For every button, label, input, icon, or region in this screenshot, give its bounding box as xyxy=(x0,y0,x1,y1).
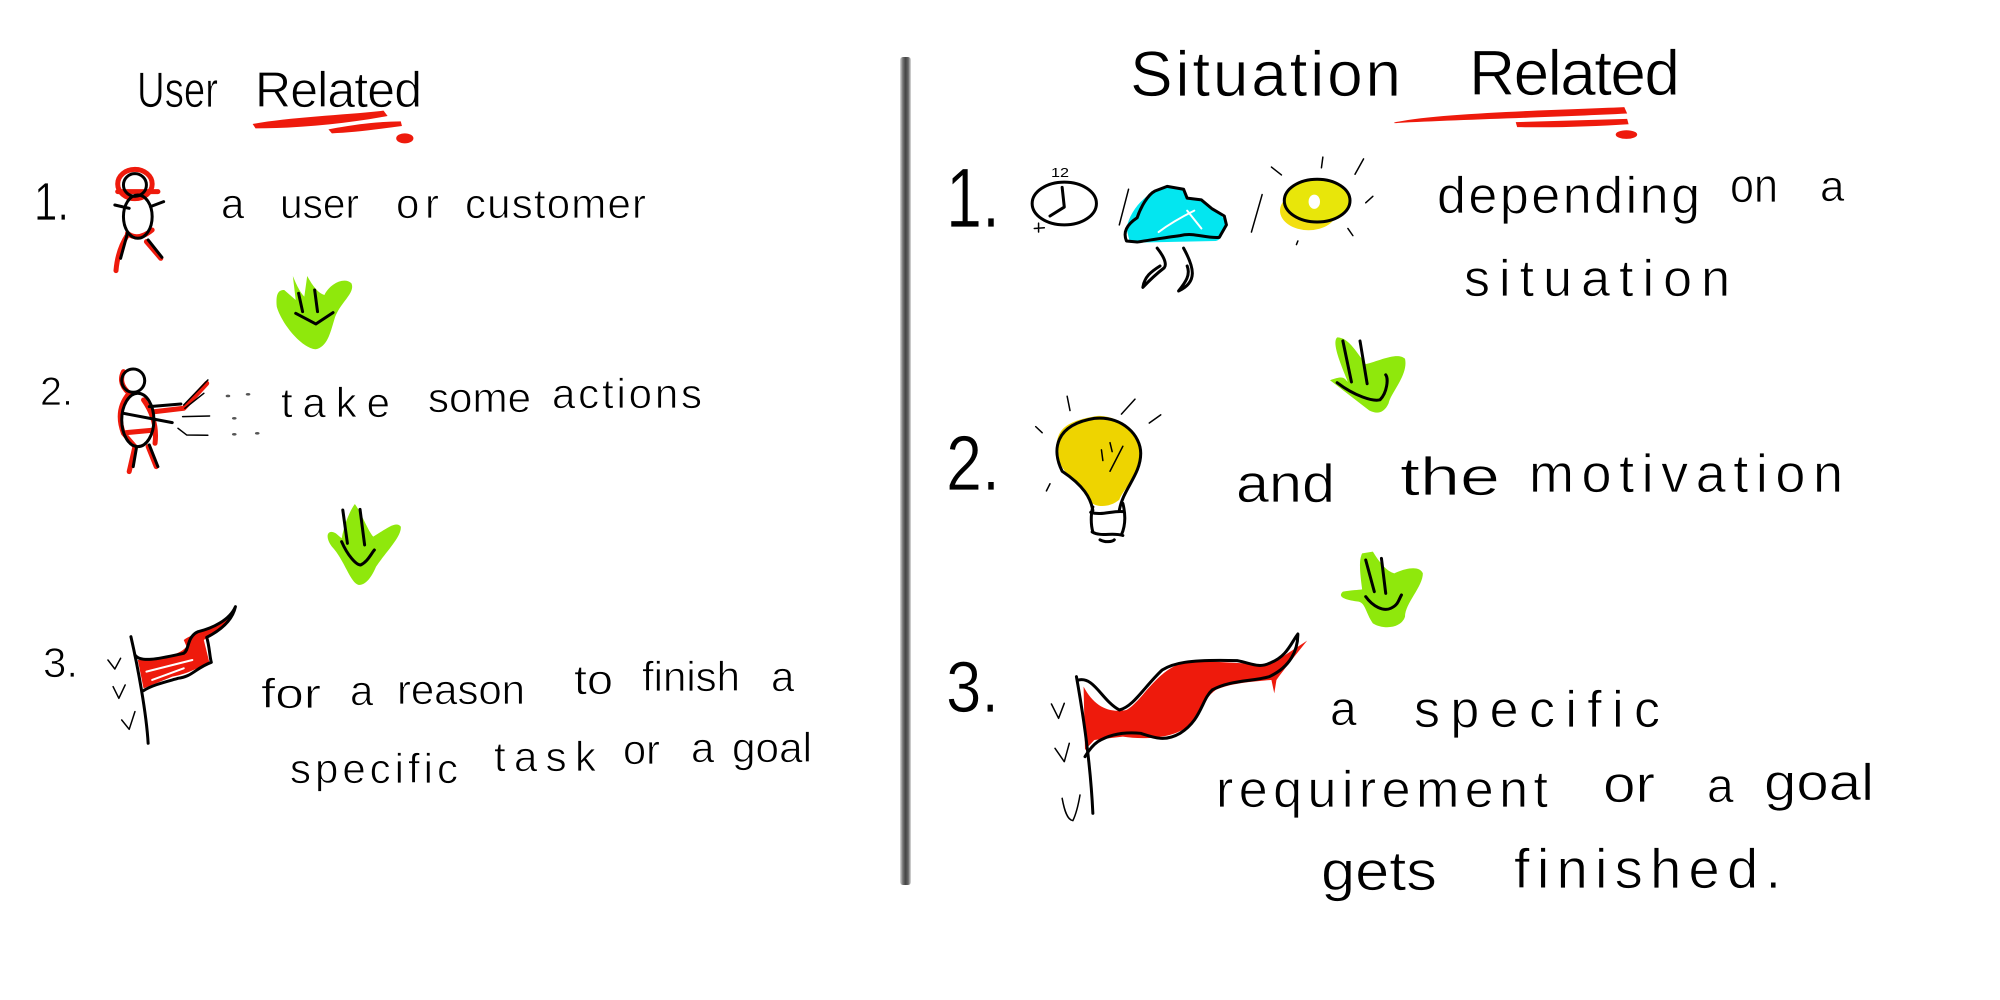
step 2 text: take xyxy=(281,379,390,426)
step 3 text: or xyxy=(623,726,660,773)
arrow: down 2 xyxy=(1341,552,1423,627)
clock label: 12 xyxy=(1051,165,1069,180)
step 3 text: a xyxy=(691,724,715,771)
step 1 text: or xyxy=(396,180,439,227)
icon: goal flag small xyxy=(108,607,235,743)
step 3 text: a xyxy=(350,667,374,714)
step 3 text: goal xyxy=(732,724,812,771)
step 2 text: the xyxy=(1400,447,1500,507)
step 1 text: a xyxy=(1820,162,1845,211)
step 3 text: goal xyxy=(1764,754,1874,812)
step 2 text: actions xyxy=(552,370,702,417)
arrow: down 1 xyxy=(277,276,352,349)
step 1 text: depending xyxy=(1437,167,1700,225)
step 1 text: customer xyxy=(465,180,646,227)
panel: user related xyxy=(34,62,812,792)
step 3 number: 3. xyxy=(43,639,78,686)
step 3 text: for xyxy=(261,670,321,717)
heading: Situation Related: Situation xyxy=(1130,38,1401,110)
divider xyxy=(900,57,911,885)
step 3 text: gets xyxy=(1321,839,1437,902)
step 1 text: on xyxy=(1730,160,1778,213)
step 3 text: specific xyxy=(290,745,458,792)
heading underline xyxy=(253,111,413,143)
step 1 text: a xyxy=(221,180,245,227)
heading: User Related: User xyxy=(137,62,218,118)
step 3 text: task xyxy=(494,733,597,780)
step 3 text: or xyxy=(1603,756,1655,814)
icon: sun xyxy=(1271,157,1373,245)
step 2 text xyxy=(1236,444,1843,514)
step 1 text: situation xyxy=(1464,250,1730,308)
heading: User Related xyxy=(137,62,422,118)
heading: User Related: Related xyxy=(255,62,422,118)
step 2 text: some xyxy=(428,374,531,421)
arrow: down 1 xyxy=(1330,337,1405,413)
icon: light bulb xyxy=(1036,396,1161,542)
step 2 number: 2. xyxy=(946,419,1000,507)
step 3 text: a xyxy=(1707,760,1734,813)
step 3 text: specific xyxy=(1414,681,1660,739)
step 3 number: 3. xyxy=(946,648,999,728)
step 1 number: 1. xyxy=(34,172,69,232)
step 2 number: 2. xyxy=(40,370,73,414)
slash xyxy=(1251,195,1262,232)
heading underline xyxy=(1394,107,1637,139)
step 3 text: a xyxy=(771,653,795,700)
step 2 text: and xyxy=(1236,454,1335,514)
icon: goal flag large xyxy=(1051,634,1307,821)
step 3 text: finish xyxy=(642,653,740,700)
step 3 text xyxy=(1216,681,1874,902)
step 2 text xyxy=(281,370,702,426)
step 1 text xyxy=(1437,160,1845,308)
step 2 text: motivation xyxy=(1529,444,1843,504)
icon: rain cloud xyxy=(1119,186,1226,291)
icon: user figure xyxy=(115,169,164,271)
icon: user taking action xyxy=(120,369,260,472)
step 3 text: to xyxy=(574,656,613,703)
heading: Situation Related xyxy=(1130,37,1680,110)
step 3 text: reason xyxy=(397,666,525,713)
step 1 text xyxy=(221,180,646,227)
panel: situation related xyxy=(946,37,1874,902)
step 3 text: finished. xyxy=(1514,837,1781,900)
heading: Situation Related: Related xyxy=(1469,37,1680,109)
step 3 text xyxy=(261,653,812,792)
step 3 text: requirement xyxy=(1216,761,1549,819)
step 3 text: a xyxy=(1330,683,1357,736)
step 1 text: user xyxy=(280,180,359,227)
arrow: down 2 xyxy=(328,504,401,585)
icon: clock xyxy=(1032,182,1096,232)
step 1 number: 1. xyxy=(946,151,1000,245)
